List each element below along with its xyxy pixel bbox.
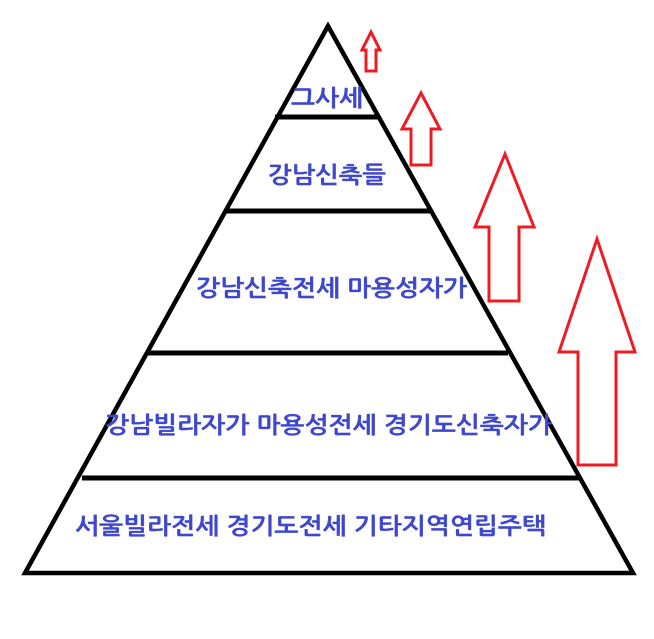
- arrow: large: [559, 239, 635, 465]
- tier 4 label: 강남빌라자가 마용성전세 경기도신축자가: [105, 412, 552, 438]
- arrow: small: [402, 93, 440, 165]
- tier 3 label: 강남신축전세 마용성자가: [196, 275, 467, 301]
- pyramid outline: [25, 26, 633, 573]
- tier 2 label: 강남신축들: [268, 162, 386, 188]
- arrow: medium: [475, 154, 534, 301]
- tier 1 label: 그사세: [291, 85, 363, 111]
- arrow: smallest: [362, 32, 380, 71]
- tier 5 label: 서울빌라전세 경기도전세 기타지역연립주택: [75, 513, 546, 539]
